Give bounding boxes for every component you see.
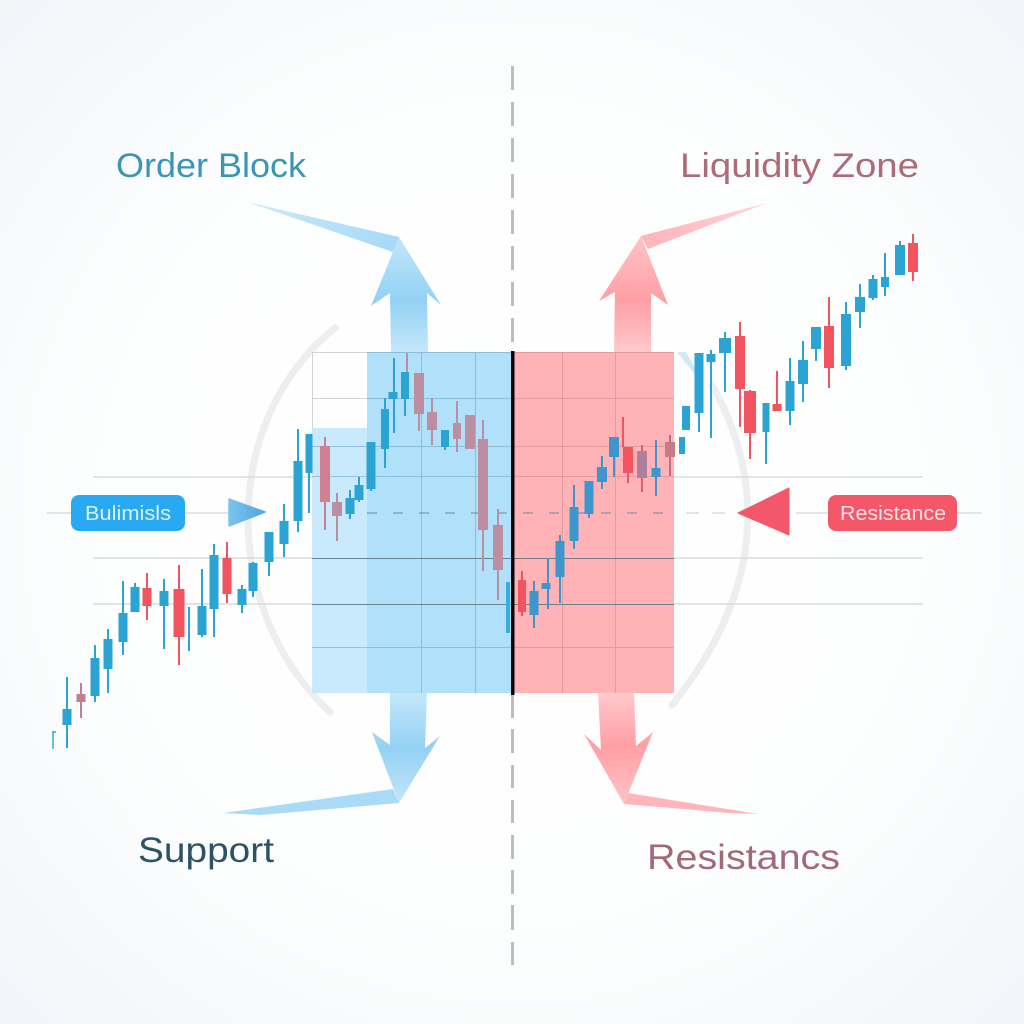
- label pill: Resistance: Resistance: [840, 503, 946, 525]
- candlestick chart: left rising leg: [53, 429, 309, 749]
- arrow: bottom-left to Support: [223, 693, 440, 815]
- arrow: bottom-right to Resistance: [584, 693, 758, 814]
- horizontal price levels: [47, 477, 982, 604]
- bullish pointer triangle: [229, 499, 265, 526]
- resistance pointer triangle: [738, 488, 789, 535]
- price levels across the zones: [312, 558, 674, 604]
- candlestick chart: inside red zone: [522, 417, 670, 628]
- label pill: Bulimisls: [71, 495, 185, 531]
- small blue wedge beside red zone: [677, 352, 696, 376]
- vertical dashed divider: [511, 66, 514, 965]
- heading: Support: Support: [138, 831, 274, 870]
- panel: red liquidity zone: [514, 352, 674, 693]
- candlestick chart: inside blue zone: [325, 353, 508, 633]
- heading: Liquidity Zone: Liquidity Zone: [680, 147, 919, 185]
- dashed midline across the zones: [367, 512, 674, 514]
- circular guide arcs: [248, 328, 748, 712]
- heading: Order Block: Order Block: [116, 147, 307, 185]
- heading: Resistancs: Resistancs: [647, 838, 840, 877]
- center black divider: [511, 351, 514, 695]
- panel: blue order block zone: [312, 352, 512, 693]
- candlestick chart: right rising leg: [682, 234, 913, 464]
- label pill: Resistance: [828, 495, 957, 531]
- arrow: top-left to Order Block: [247, 202, 441, 352]
- arrow: top-right to Liquidity Zone: [599, 203, 767, 352]
- label pill: Bulimisls: Bulimisls: [85, 503, 171, 525]
